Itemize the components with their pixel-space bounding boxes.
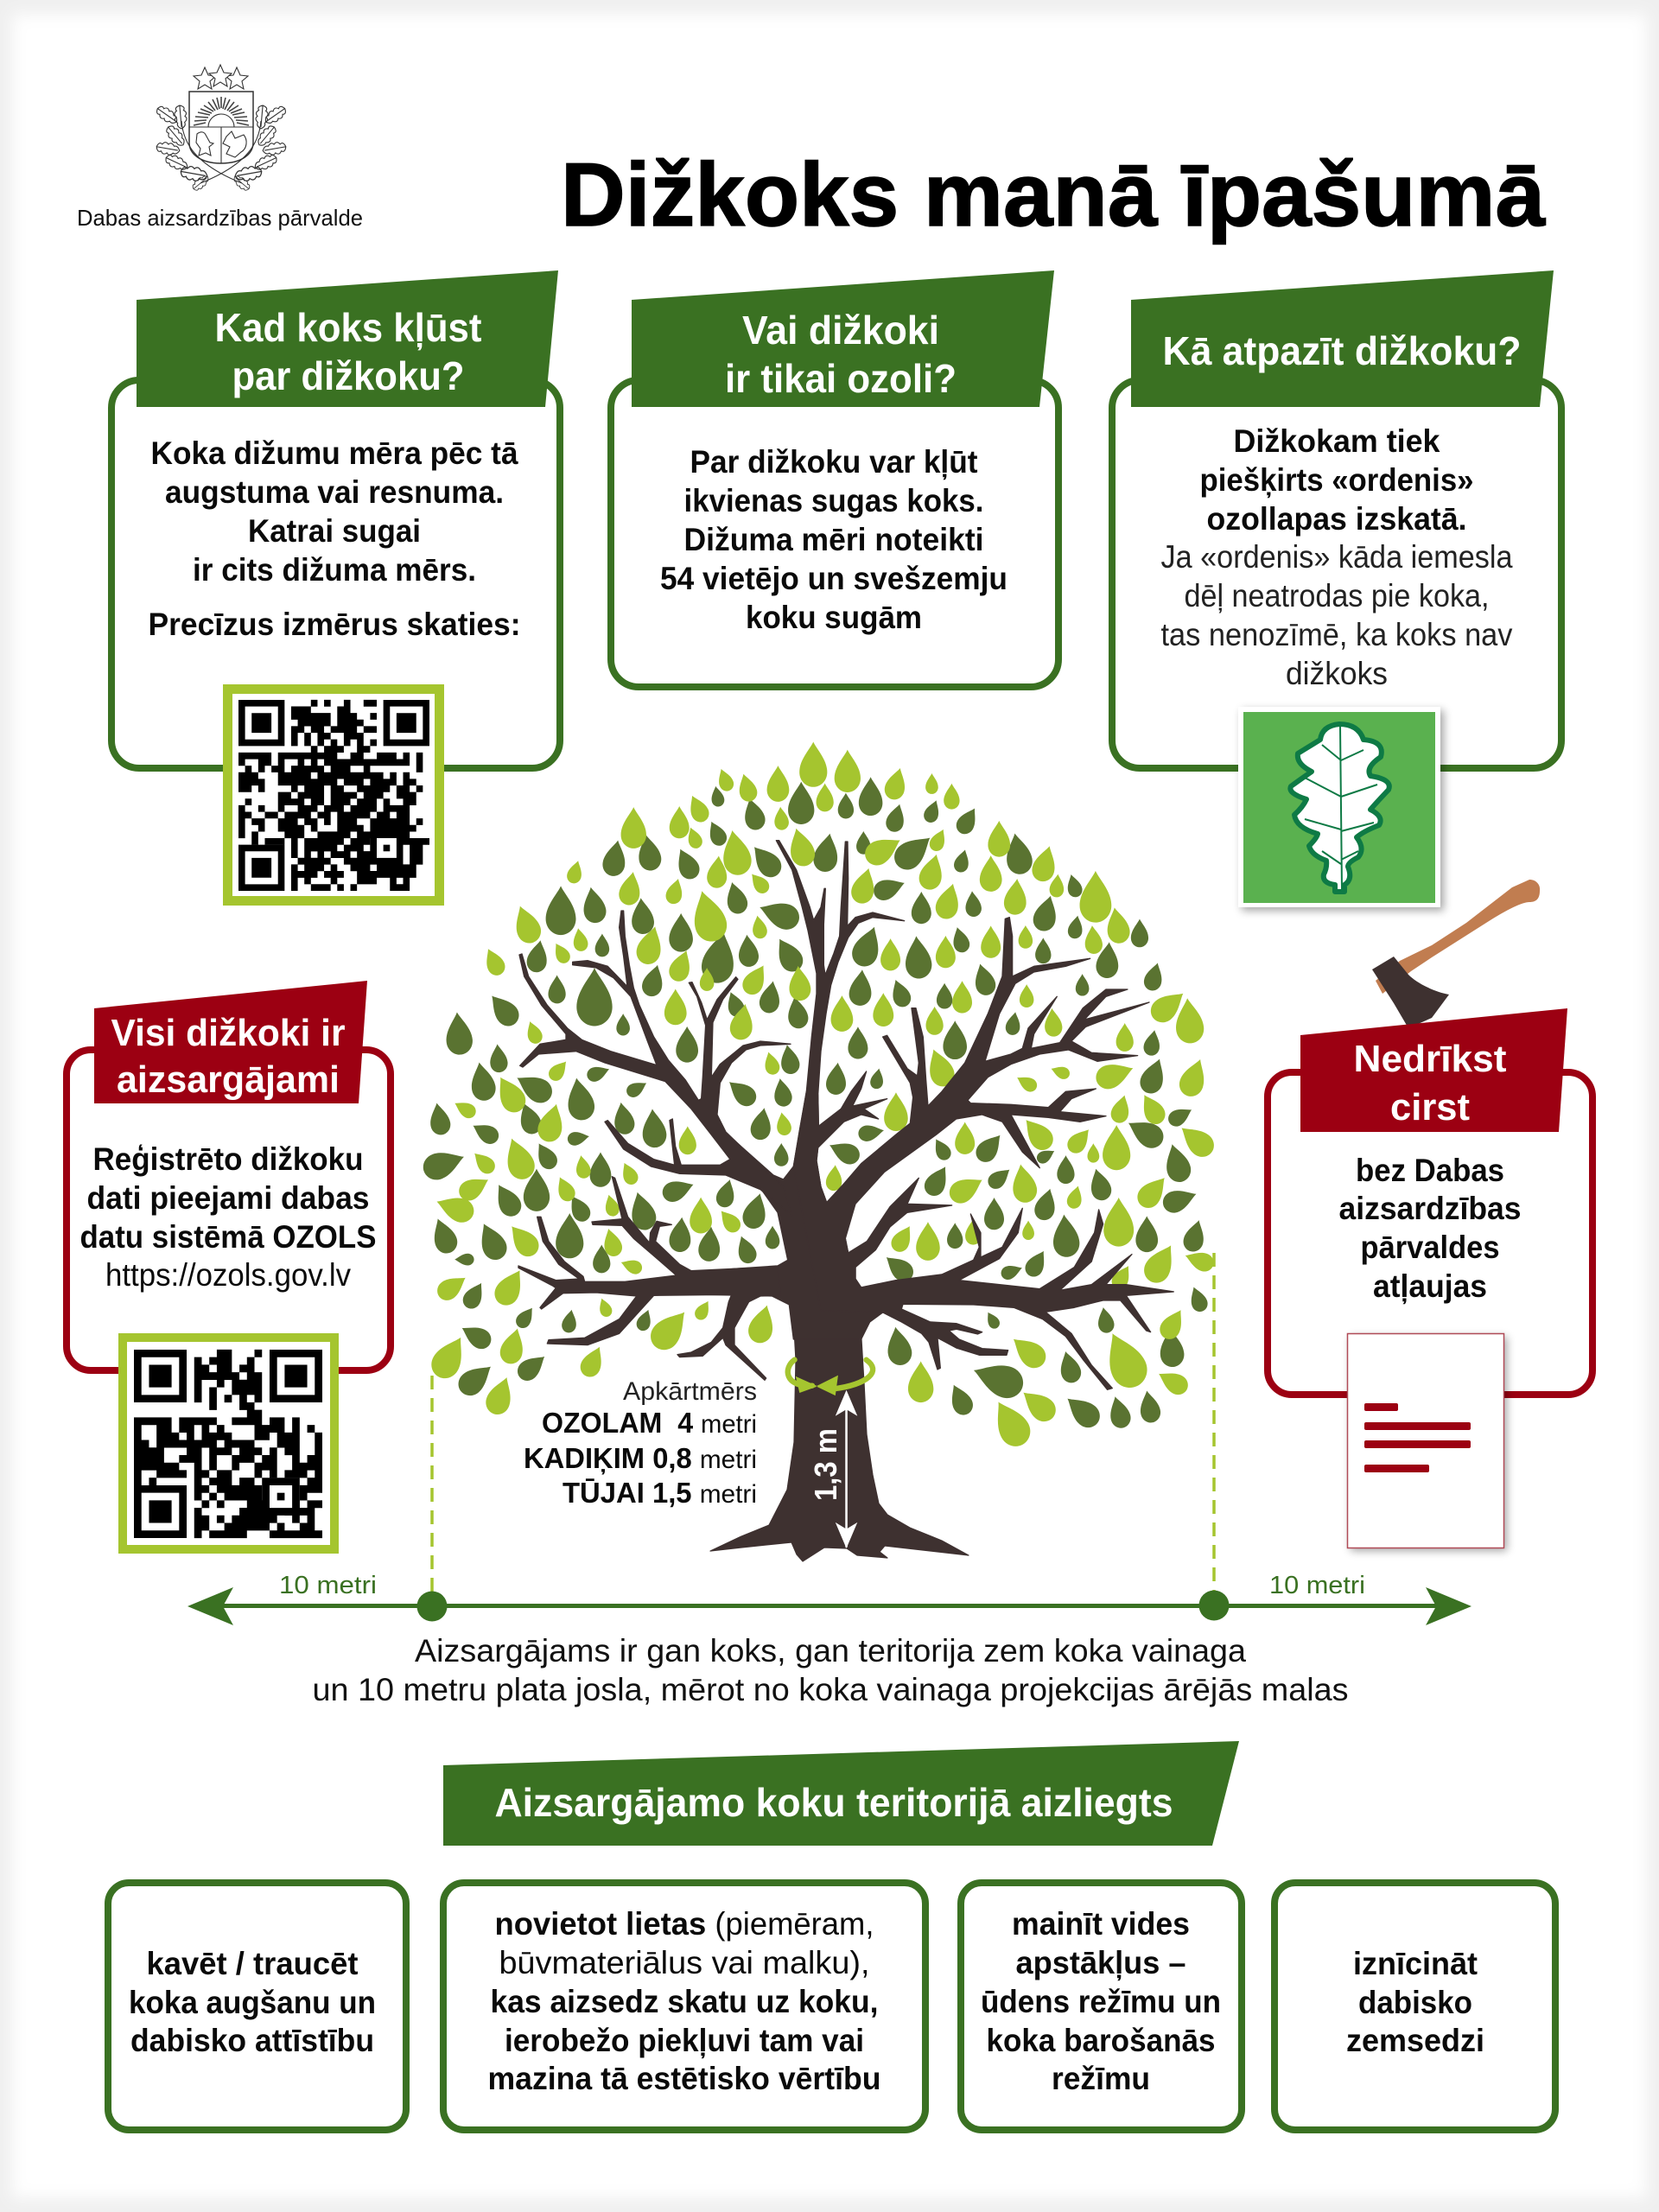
trunk and branches: [518, 841, 1173, 1561]
body text: Katrai sugai: [248, 513, 421, 549]
body text: piešķirts «ordenis»: [1199, 462, 1474, 499]
heading banner: [1131, 270, 1554, 407]
box: changing conditions: mainīt vides: [1012, 1906, 1190, 1942]
heading banner: Kad koks kļūst: [214, 305, 482, 351]
box: placing objects: novietot lietas (piemēram,: [494, 1906, 874, 1942]
circumference text block: [524, 1377, 757, 1509]
distance labels: [279, 1572, 1365, 1599]
panel: when a tree becomes a giant: [111, 270, 560, 906]
box: placing objects: [443, 1883, 925, 2130]
body text: atļaujas: [1373, 1268, 1487, 1305]
box: changing conditions: apstākļus –: [1016, 1945, 1185, 1981]
body text: https://ozols.gov.lv: [105, 1257, 351, 1293]
heading banner: Visi dižkoki ir: [111, 1012, 346, 1054]
circumference text block: KADIĶIM 0,8 metri: [524, 1442, 757, 1474]
body text: 54 vietējo un svešzemju: [660, 561, 1007, 596]
body text: pārvaldes: [1360, 1230, 1500, 1265]
box: placing objects: mazina tā estētisko vērtību: [487, 2061, 881, 2096]
label: 1.3 m: 1,3 m: [808, 1428, 843, 1501]
QR code: size table: [223, 684, 444, 906]
box: destroying ground cover: zemsedzi: [1346, 2023, 1484, 2058]
box: destroying ground cover: [1274, 1883, 1555, 2130]
icon: axe: [1372, 880, 1540, 1028]
box: destroying ground cover: dabisko: [1358, 1985, 1472, 2020]
panel: how to recognise: [1112, 270, 1561, 911]
body text: Par dižkoku var kļūt: [690, 444, 978, 480]
body text: datu sistēmā OZOLS: [79, 1219, 377, 1255]
heading banner: par dižkoku?: [232, 353, 465, 398]
heading banner: Vai dižkoki: [742, 308, 939, 353]
QR code: ozols.gov.lv: [118, 1333, 339, 1554]
circumference text block: OZOLAM 4 metri: [542, 1407, 757, 1439]
box: changing conditions: [961, 1883, 1242, 2130]
box: placing objects: būvmateriālus vai malku),: [499, 1945, 869, 1980]
heading banner: [137, 270, 558, 407]
protection zone diagram: [188, 1253, 1471, 1625]
heading banner: aizsargājami: [117, 1058, 340, 1101]
body text: Dižkokam tiek: [1234, 423, 1440, 459]
QR and panel: protected giants: [67, 981, 391, 1554]
body text: koku sugām: [746, 600, 922, 635]
body text: Koka dižumu mēra pēc tā: [150, 435, 518, 471]
heading banner: [94, 981, 367, 1103]
body text: Dižuma mēri noteikti: [684, 522, 983, 557]
body text: [1161, 423, 1513, 691]
heading banner: Nedrīkst: [1353, 1038, 1507, 1080]
body text: dēļ neatrodas pie koka,: [1184, 578, 1490, 613]
body text: [79, 1141, 377, 1293]
heading banner: prohibited in protected territory: Aizsargājamo koku teritorijā aizliegts: [494, 1780, 1173, 1825]
circumference text block: Apkārtmērs: [623, 1377, 757, 1406]
heading banner: ir tikai ozoli?: [725, 356, 957, 401]
title: Dižkoks manā īpašumā: [561, 145, 1546, 245]
heading banner: cirst: [1390, 1086, 1470, 1128]
circumference text block: TŪJAI 1,5 metri: [563, 1477, 757, 1509]
body text: bez Dabas: [1356, 1153, 1504, 1188]
body text: Ja «ordenis» kāda iemesla: [1161, 539, 1513, 575]
heading banner: [632, 270, 1054, 407]
body text: [660, 444, 1007, 635]
distance labels: 10 metri: [279, 1572, 377, 1599]
box: hinder growth: kavēt / traucēt: [147, 1946, 358, 1981]
logo: coat of arms and agency name: [77, 65, 363, 231]
leaves: [419, 742, 1219, 1452]
box: changing conditions: koka barošanās: [987, 2023, 1215, 2058]
box: destroying ground cover: iznīcināt: [1353, 1946, 1478, 1981]
body text: Precīzus izmērus skaties:: [149, 607, 520, 642]
box: hinder growth: koka augšanu un: [129, 1985, 376, 2020]
tree illustration: [419, 742, 1219, 1561]
distance labels: 10 metri: [1269, 1572, 1365, 1599]
box: placing objects: ierobežo piekļuvi tam vai: [505, 2023, 864, 2059]
agency name: Dabas aizsardzības pārvalde: [77, 205, 363, 231]
panel: cutting prohibited: [1268, 880, 1592, 1551]
body text: dati pieejami dabas: [86, 1180, 370, 1216]
body text: aizsardzības: [1339, 1191, 1521, 1226]
body text: ikvienas sugas koks.: [684, 483, 983, 518]
icon: coat of arms: [154, 65, 289, 193]
explanatory text: [313, 1633, 1348, 1707]
body text: dižkoks: [1286, 656, 1388, 691]
body text: tas nenozīmē, ka koks nav: [1161, 617, 1513, 652]
body text: [1339, 1153, 1521, 1305]
dashed canopy projection lines: [432, 1253, 1214, 1594]
heading banner: [1300, 1008, 1567, 1132]
body text: Reģistrēto dižkoku: [93, 1141, 363, 1177]
arrow: 1.3 m height: [836, 1390, 857, 1548]
icon: oak leaf order badge: [1238, 707, 1444, 911]
body text: augstuma vai resnuma.: [165, 474, 504, 510]
heading banner: prohibited in protected territory: [443, 1741, 1239, 1846]
box: changing conditions: ūdens režīmu un: [981, 1984, 1221, 2019]
box: hinder growth: [108, 1883, 406, 2130]
box: placing objects: kas aizsedz skatu uz koku,: [491, 1984, 878, 2019]
measurement ring around trunk: [788, 1360, 873, 1395]
box: hinder growth: dabisko attīstību: [130, 2023, 374, 2058]
explanatory text: un 10 metru plata josla, mērot no koka vainaga projekcijas ārējās malas: [313, 1672, 1348, 1707]
heading banner: Kā atpazīt dižkoku?: [1163, 328, 1521, 373]
box: changing conditions: režīmu: [1052, 2061, 1150, 2096]
double arrow with dots: [188, 1587, 1471, 1625]
icon: permit document: [1348, 1334, 1507, 1551]
body text: [149, 435, 520, 642]
explanatory text: Aizsargājams ir gan koks, gan teritorija zem koka vainaga: [415, 1633, 1246, 1669]
body text: ir cits dižuma mērs.: [193, 552, 476, 588]
body text: ozollapas izskatā.: [1206, 501, 1467, 537]
panel: are giants only oaks: [611, 270, 1058, 687]
